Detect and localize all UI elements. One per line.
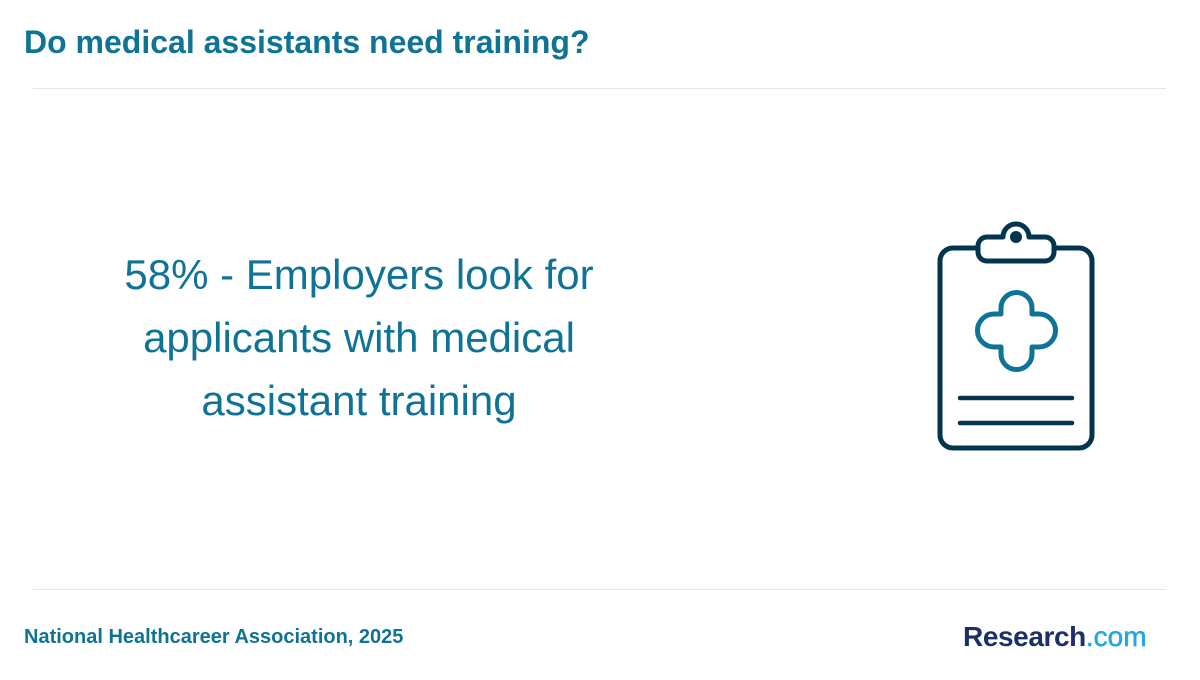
clip hole [1010,231,1022,243]
clipboard clip [978,224,1054,261]
source: National Healthcareer Association, 2025 [24,626,403,648]
clipboard board [940,248,1092,448]
main statistic text: assistant training [201,377,517,424]
main statistic text: applicants with medical [143,314,575,361]
medical cross [978,292,1056,370]
icon: clipboard with medical cross [938,222,1094,450]
logo: Research.com [963,621,1147,652]
main statistic text [124,251,594,424]
title: Do medical assistants need training? [24,24,589,60]
main statistic text: 58% - Employers look for [124,251,594,298]
text lines [960,398,1072,423]
